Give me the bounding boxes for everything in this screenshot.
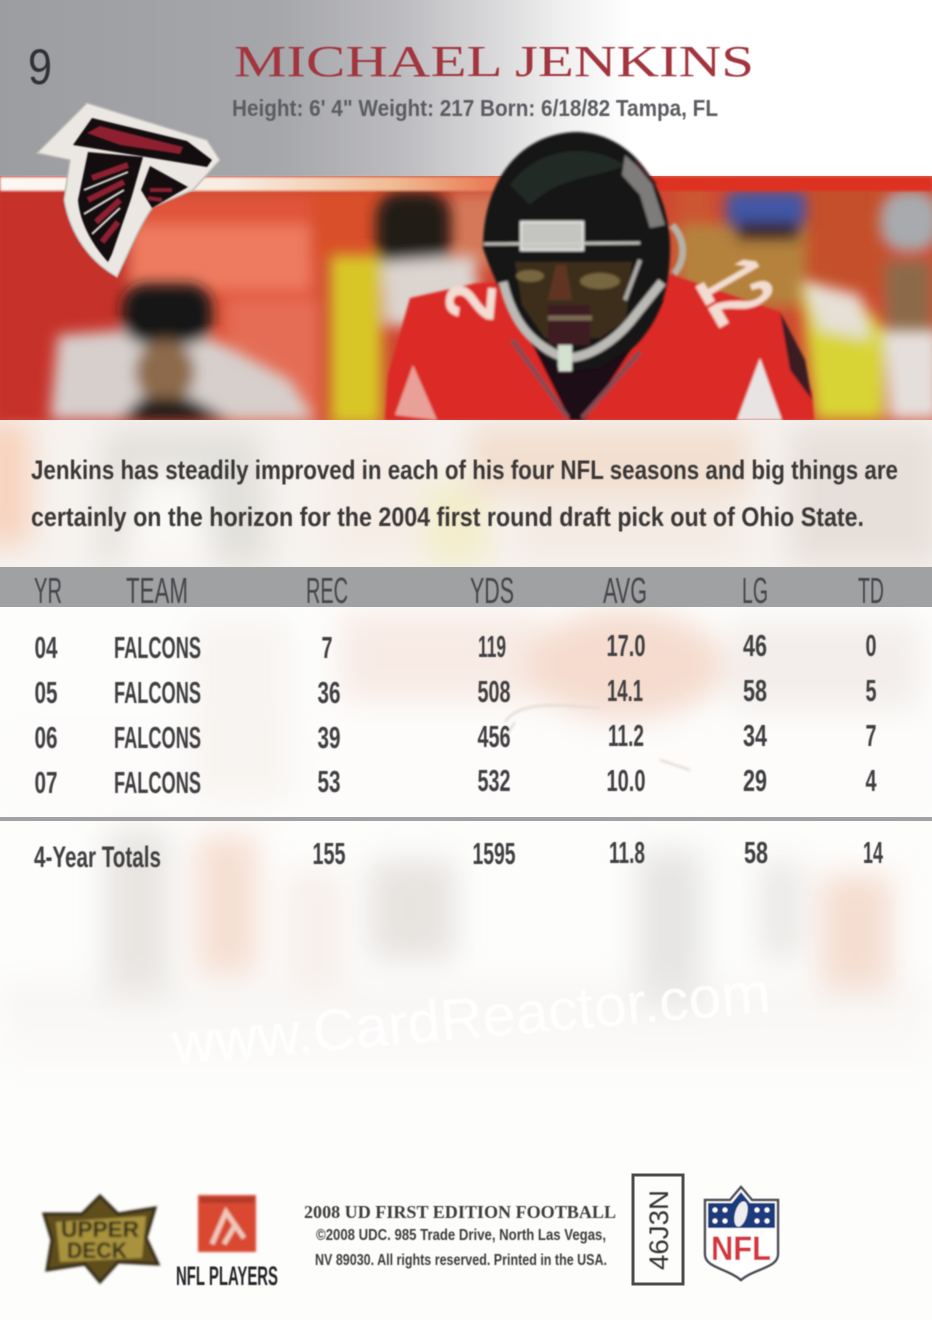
jersey number right: 12 — [676, 241, 795, 340]
row 2007: 07 — [34, 765, 58, 800]
totals row: 11.8 — [609, 835, 645, 870]
code box — [633, 1175, 683, 1284]
blurred officials behind — [330, 190, 932, 425]
table header labels: TD — [858, 570, 884, 611]
jersey number left: 2 — [431, 281, 512, 323]
player jersey — [385, 241, 814, 420]
totals row: 14 — [863, 835, 883, 870]
season rows — [34, 628, 877, 800]
watermark: www.CardReactor.com — [168, 960, 773, 1077]
totals row: 155 — [312, 836, 346, 871]
row 2004: 04 — [34, 630, 58, 665]
code box: 46J3N — [644, 1190, 674, 1270]
stats table — [0, 567, 932, 874]
table header labels: TEAM — [126, 570, 188, 611]
row 2007: 532 — [478, 763, 510, 798]
photo band — [0, 170, 932, 430]
row 2005: FALCONS — [114, 675, 201, 710]
row 2007: 10.0 — [606, 763, 646, 798]
ghost legs — [196, 835, 258, 975]
table header labels: REC — [306, 570, 348, 611]
player vitals: Height: 6' 4" Weight: 217 Born: 6/18/82 Tampa, FL — [232, 95, 718, 121]
row 2007: 29 — [743, 763, 767, 798]
row 2006: 06 — [34, 720, 58, 755]
icon: falcons logo — [37, 103, 220, 277]
row 2004: 46 — [743, 628, 767, 663]
totals row — [34, 835, 883, 874]
header gray gradient — [0, 0, 932, 180]
row 2005: 36 — [318, 675, 340, 710]
table header labels: LG — [742, 570, 768, 611]
row 2006: 39 — [318, 720, 340, 755]
icon: upper deck logo: DECK — [67, 1238, 127, 1263]
stadium backdrop — [0, 170, 932, 430]
ghost body — [340, 612, 540, 702]
icon: nfl shield: NFL — [711, 1230, 771, 1268]
row 2004: 7 — [322, 630, 332, 665]
table header labels — [34, 570, 884, 611]
row 2005: 508 — [478, 674, 510, 709]
table header labels: AVG — [603, 570, 647, 611]
row 2004 — [34, 628, 876, 665]
copyright text: 2008 UD FIRST EDITION FOOTBALL — [304, 1202, 616, 1222]
row 2006: 34 — [743, 718, 768, 753]
blurred official left — [50, 284, 315, 420]
row 2006: 7 — [866, 718, 876, 753]
row 2005 — [34, 673, 876, 710]
row 2007: 53 — [318, 764, 340, 799]
nfl players label: NFL PLAYERS — [176, 1261, 278, 1291]
copyright text — [304, 1202, 616, 1269]
row 2006: 456 — [478, 719, 510, 754]
totals row: 1595 — [472, 836, 516, 871]
icon: upper deck logo: UPPER — [61, 1217, 139, 1242]
row 2006: FALCONS — [114, 720, 201, 755]
biography text — [31, 455, 898, 532]
table header labels: YR — [34, 570, 62, 611]
copyright text: ©2008 UDC. 985 Trade Drive, North Las Vegas, — [316, 1227, 606, 1244]
row 2005: 05 — [34, 675, 58, 710]
row 2005: 5 — [866, 673, 876, 708]
copyright text: NV 89030. All rights reserved. Printed in the USA. — [315, 1252, 607, 1269]
row 2006: 11.2 — [608, 718, 644, 753]
row 2004: 17.0 — [606, 628, 646, 663]
row 2006 — [34, 718, 876, 755]
row 2007 — [34, 763, 877, 800]
row 2005: 58 — [743, 673, 767, 708]
row 2004: 119 — [478, 629, 506, 664]
row 2004: 0 — [866, 628, 876, 663]
table header band — [0, 567, 932, 607]
ghost photo background — [0, 420, 932, 1070]
icon: nfl players logo — [176, 1195, 278, 1291]
white rule above photo — [0, 177, 932, 191]
card number: 9 — [28, 39, 52, 95]
totals row: 4-Year Totals — [34, 841, 161, 874]
table header labels: YDS — [470, 570, 514, 611]
fade to white — [0, 1000, 932, 1130]
row 2007: FALCONS — [114, 765, 201, 800]
row 2007: 4 — [866, 763, 877, 798]
player name: MICHAEL JENKINS — [234, 37, 754, 86]
row 2004: FALCONS — [114, 630, 201, 665]
totals row: 58 — [744, 835, 768, 870]
player helmet — [483, 132, 683, 372]
icon: upper deck logo — [44, 1196, 158, 1282]
row 2005: 14.1 — [607, 673, 643, 708]
icon: nfl shield — [705, 1187, 778, 1280]
